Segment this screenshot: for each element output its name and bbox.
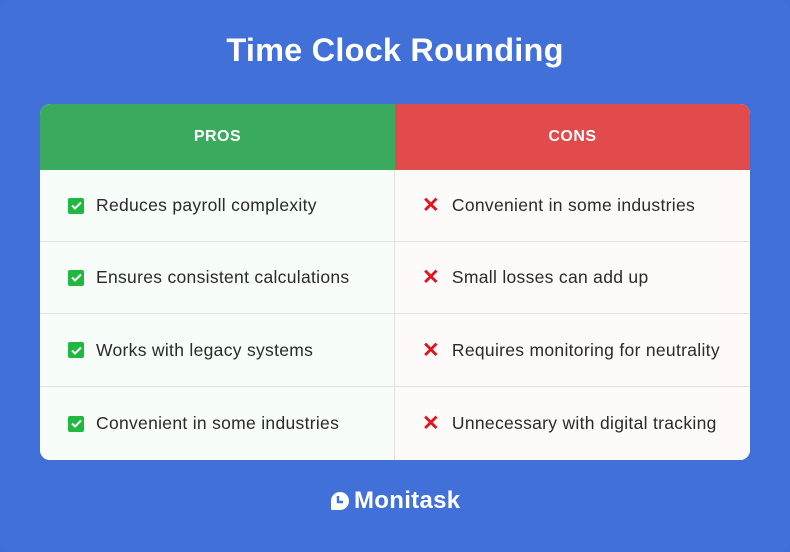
- pro item 1: Reduces payroll complexity: [96, 195, 317, 215]
- con item 4: [395, 387, 750, 460]
- con item 3: ✕: [422, 338, 440, 362]
- pro item 1: [40, 170, 395, 242]
- logo: Monitask: Monitask: [354, 487, 460, 514]
- pro item 2: [40, 242, 395, 314]
- con item 4: Unnecessary with digital tracking: [452, 413, 717, 433]
- panel: pros/cons table: [40, 104, 750, 460]
- con item 1: ✕: [422, 194, 440, 217]
- con item 1: [395, 170, 750, 242]
- con item 1: Convenient in some industries: [452, 195, 695, 215]
- con item 3: Requires monitoring for neutrality: [452, 340, 720, 360]
- con item 2: ✕: [422, 266, 440, 289]
- heading: pros: [40, 104, 395, 170]
- con item 3: [395, 314, 750, 387]
- con item 2: Small losses can add up: [452, 267, 648, 287]
- pro item 3: [40, 314, 395, 387]
- pro item 2: Ensures consistent calculations: [96, 267, 349, 287]
- pro item 3: Works with legacy systems: [96, 340, 313, 360]
- con item 4: ✕: [422, 412, 440, 435]
- heading: pros: PROS: [194, 128, 241, 145]
- con item 2: [395, 242, 750, 314]
- pro item 4: Convenient in some industries: [96, 413, 339, 433]
- pro item 4: [40, 387, 395, 460]
- title: Time Clock Rounding: [226, 32, 564, 68]
- heading: cons: [395, 104, 750, 170]
- heading: cons: CONS: [548, 128, 597, 145]
